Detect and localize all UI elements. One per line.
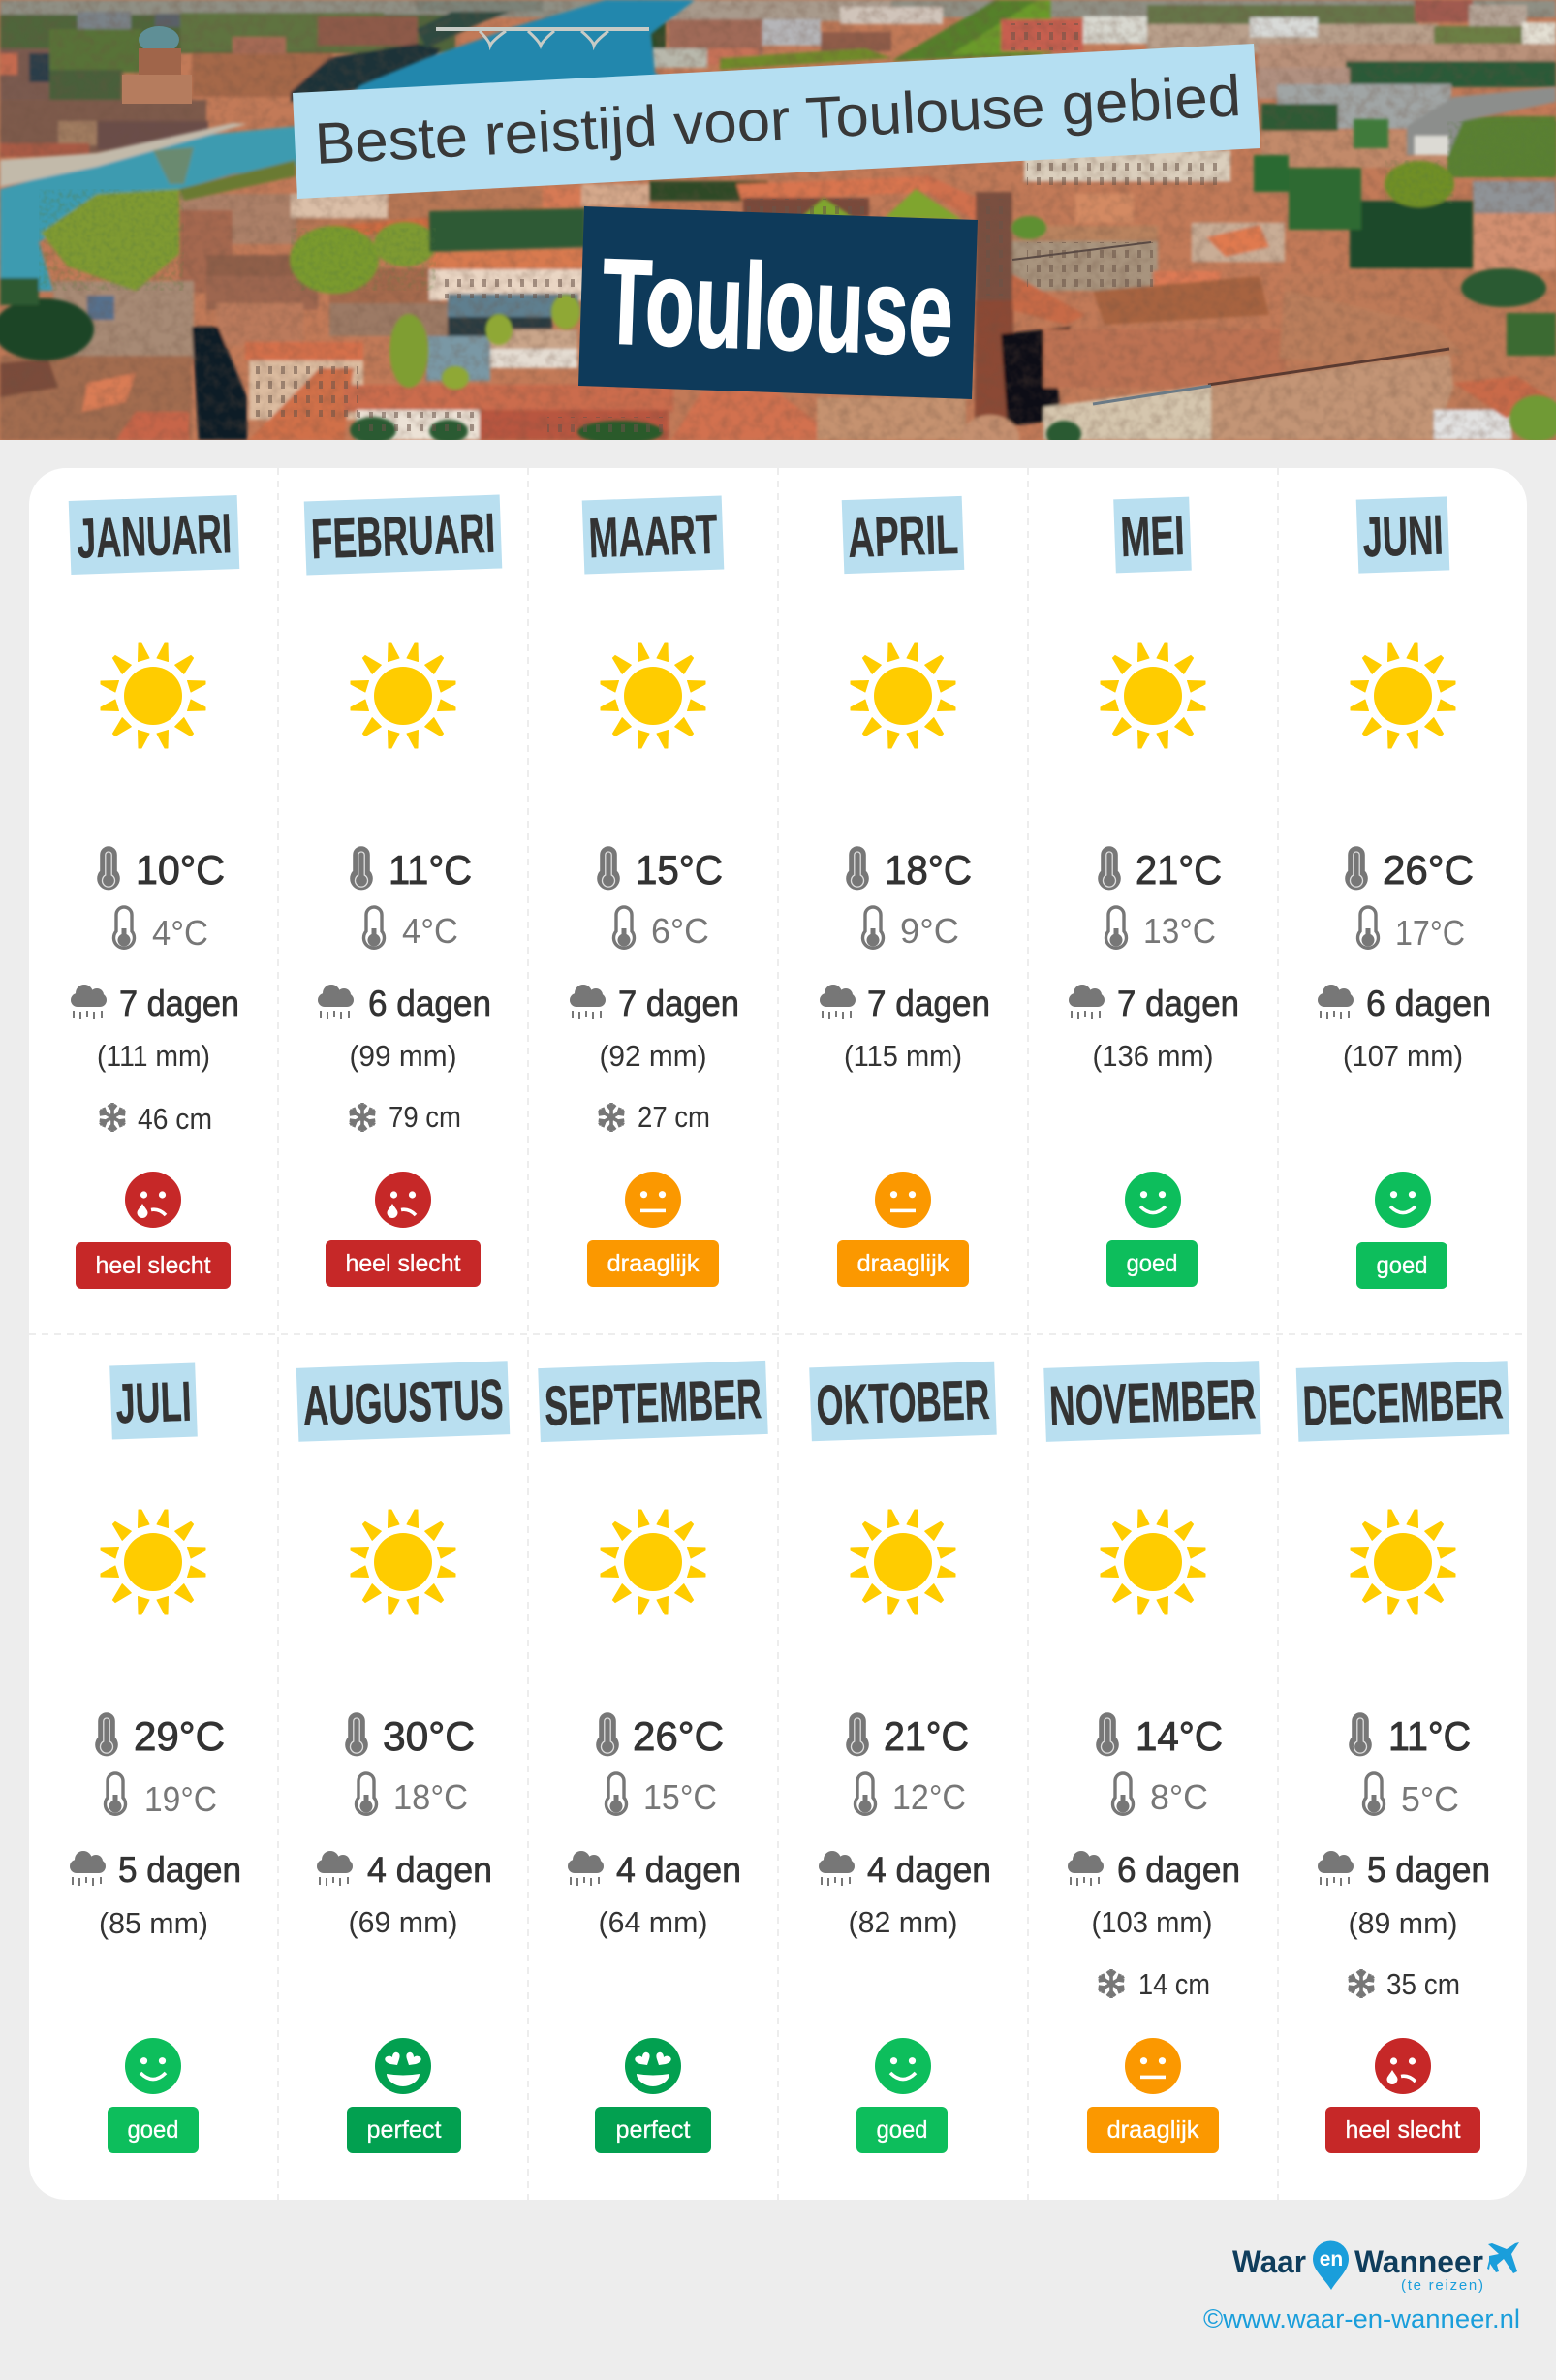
rating label: heel slecht — [95, 1252, 211, 1279]
low temperature — [357, 1773, 468, 1817]
icon: sun — [101, 1510, 205, 1614]
low temperature — [364, 907, 458, 951]
rain days: 4 dagen — [867, 1850, 991, 1890]
month label: juni: JUNI — [1361, 504, 1445, 569]
logo: Waar en Wanneer: Wanneer — [1354, 2244, 1483, 2279]
rating face — [1375, 2038, 1431, 2094]
month: mei — [1069, 497, 1239, 1287]
rating label — [595, 2107, 711, 2153]
snow depth — [597, 1100, 710, 1134]
high temperature: 15°C — [636, 847, 723, 892]
low temperature: 4°C — [152, 913, 208, 953]
low temperature: 18°C — [393, 1777, 468, 1817]
month label: februari — [304, 494, 502, 576]
rating label: goed — [876, 2116, 928, 2144]
high temperature — [351, 847, 472, 892]
month label: september — [538, 1361, 768, 1442]
icon: sun — [851, 643, 955, 748]
high temperature: 11°C — [389, 847, 472, 892]
river, quay and trees — [0, 0, 1556, 448]
high temperature: 10°C — [136, 847, 225, 892]
rain days — [318, 984, 491, 1023]
rainfall: (107 mm) — [1343, 1039, 1463, 1073]
low temperature: 9°C — [900, 911, 959, 951]
rating face — [625, 1172, 681, 1228]
month label: januari: JANUARI — [76, 502, 233, 571]
title banner — [293, 44, 1260, 199]
icon: sun — [1101, 643, 1205, 748]
website credit: ©www.waar-en-wanneer.nl — [1203, 2304, 1520, 2333]
low temperature — [614, 907, 709, 951]
rating label — [1325, 2107, 1480, 2153]
rainfall: (99 mm) — [349, 1039, 457, 1073]
month label: mei — [1113, 497, 1192, 573]
high temperature — [98, 847, 225, 892]
low temperature: 17°C — [1395, 913, 1465, 953]
rainfall: (89 mm) — [1349, 1906, 1457, 1940]
rain days — [820, 984, 990, 1023]
month: april — [820, 496, 990, 1287]
rain days: 5 dagen — [118, 1850, 241, 1890]
month label: maart: MAART — [587, 503, 719, 570]
high temperature — [598, 847, 723, 892]
high temperature: 26°C — [633, 1713, 724, 1759]
rating face — [1125, 2038, 1181, 2094]
rating label: goed — [1376, 1252, 1428, 1279]
high temperature — [847, 1713, 969, 1759]
month label: juli: JULI — [114, 1370, 193, 1435]
rating face — [125, 1172, 181, 1228]
low temperature: 12°C — [892, 1777, 966, 1817]
rainfall: (115 mm) — [844, 1039, 962, 1073]
low temperature: 5°C — [1401, 1779, 1459, 1819]
rating face — [1125, 1172, 1181, 1228]
rain days — [570, 984, 739, 1023]
snow depth: 35 cm — [1386, 1967, 1460, 2001]
high temperature: 11°C — [1388, 1713, 1471, 1759]
low temperature — [105, 1773, 217, 1819]
icon: sun — [101, 643, 205, 748]
high temperature: 14°C — [1136, 1713, 1223, 1759]
rainfall: (92 mm) — [599, 1039, 707, 1073]
month: oktober — [809, 1362, 997, 2153]
building windows — [252, 23, 1226, 436]
rainfall: (111 mm) — [97, 1039, 210, 1073]
low temperature — [607, 1773, 717, 1817]
rating label: perfect — [616, 2116, 691, 2144]
month: juli — [70, 1362, 241, 2153]
icon: plane — [1487, 2242, 1519, 2273]
rainfall: (82 mm) — [849, 1905, 957, 1939]
low temperature — [855, 1773, 966, 1817]
month label: april — [842, 496, 964, 574]
rain days — [1318, 1850, 1490, 1890]
rating label — [856, 2107, 948, 2153]
icon: sun — [601, 643, 705, 748]
month: januari — [69, 495, 239, 1289]
rain days: 6 dagen — [1366, 984, 1491, 1023]
rating label — [1087, 2107, 1219, 2153]
icon: sun — [1351, 1510, 1455, 1614]
rating label — [347, 2107, 461, 2153]
high temperature — [847, 847, 972, 892]
snow depth — [1347, 1967, 1460, 2001]
rain days: 4 dagen — [616, 1850, 741, 1890]
month label: juli — [109, 1362, 198, 1440]
snow depth — [1097, 1967, 1210, 2001]
icon: sun — [1351, 643, 1455, 748]
rain days — [1069, 984, 1239, 1023]
snow depth — [98, 1102, 212, 1136]
rating label: draaglijk — [1106, 2116, 1199, 2144]
rating label: perfect — [366, 2116, 442, 2144]
rainfall: (85 mm) — [99, 1906, 208, 1940]
rating label — [837, 1240, 969, 1287]
rain days: 6 dagen — [1117, 1850, 1240, 1890]
high temperature: 18°C — [885, 847, 972, 892]
month: september — [538, 1361, 768, 2153]
rain days: 7 dagen — [119, 984, 239, 1023]
city name banner: Toulouse — [600, 235, 955, 381]
low temperature — [1364, 1773, 1459, 1819]
rating label — [587, 1240, 719, 1287]
icon: map pin: en — [1320, 2248, 1343, 2270]
month label: februari: FEBRUARI — [310, 502, 496, 571]
rooflines — [1012, 242, 1449, 404]
rating label — [76, 1242, 231, 1289]
month label: april: APRIL — [847, 503, 959, 570]
high temperature: 29°C — [134, 1713, 225, 1759]
logo: Waar en Wanneer: (te reizen) — [1401, 2277, 1483, 2294]
dome of La Grave — [122, 26, 192, 104]
rain days — [819, 1850, 991, 1890]
rainfall: (64 mm) — [599, 1905, 707, 1939]
logo: Waar en Wanneer — [1232, 2240, 1519, 2294]
rating label — [1356, 1242, 1447, 1289]
bridge over the river — [436, 29, 649, 46]
rating face — [875, 2038, 931, 2094]
logo: Waar en Wanneer: Waar — [1232, 2244, 1306, 2279]
month label: januari — [69, 495, 239, 575]
icon: sun — [601, 1510, 705, 1614]
rating label: draaglijk — [607, 1250, 700, 1277]
city name banner — [578, 206, 978, 399]
month label: november: NOVEMBER — [1048, 1367, 1257, 1438]
icon: sun — [851, 1510, 955, 1614]
low temperature: 15°C — [643, 1777, 717, 1817]
rating label: goed — [1126, 1250, 1178, 1277]
rain days: 6 dagen — [368, 984, 491, 1023]
high temperature: 26°C — [1383, 847, 1474, 892]
low temperature — [862, 907, 959, 951]
low temperature — [1106, 907, 1216, 951]
high temperature: 30°C — [383, 1713, 475, 1759]
rating face — [875, 1172, 931, 1228]
rain days — [317, 1850, 492, 1890]
rating label: heel slecht — [1345, 2116, 1461, 2144]
rating label — [1106, 1240, 1198, 1287]
rating label: draaglijk — [856, 1250, 949, 1277]
rooftop texture — [0, 0, 1556, 440]
icon: map pin — [1313, 2240, 1349, 2290]
panel: months card — [29, 468, 1527, 2200]
rating label — [326, 1240, 481, 1287]
month label: maart — [582, 496, 724, 574]
rainfall: (103 mm) — [1091, 1905, 1213, 1939]
low temperature — [1358, 907, 1465, 953]
snow depth — [348, 1100, 461, 1134]
rating label: goed — [128, 2116, 178, 2144]
foliage texture — [39, 121, 1556, 291]
rating label — [108, 2107, 199, 2153]
low temperature: 19°C — [144, 1779, 217, 1819]
month: februari — [304, 494, 502, 1287]
icon: sun — [1101, 1510, 1205, 1614]
rain days — [1068, 1850, 1240, 1890]
snow depth: 79 cm — [389, 1100, 461, 1134]
month: december — [1296, 1361, 1509, 2153]
rain days: 7 dagen — [618, 984, 739, 1023]
month label: juni — [1356, 496, 1449, 574]
rainfall: (69 mm) — [349, 1905, 457, 1939]
month label: augustus: AUGUSTUS — [301, 1367, 505, 1438]
rain days: 7 dagen — [1117, 984, 1239, 1023]
rain days — [70, 1850, 241, 1890]
rating face — [125, 2038, 181, 2094]
snow depth: 14 cm — [1138, 1967, 1210, 2001]
header photo: aerial view of Toulouse — [0, 0, 1556, 461]
rating face — [375, 2038, 431, 2094]
low temperature — [1112, 1773, 1208, 1817]
icon: sun — [351, 1510, 455, 1614]
high temperature: 21°C — [1136, 847, 1222, 892]
month label: mei: MEI — [1119, 504, 1186, 569]
month: november — [1043, 1361, 1261, 2153]
low temperature: 6°C — [651, 911, 709, 951]
rainfall: (136 mm) — [1093, 1039, 1213, 1073]
rain days: 4 dagen — [367, 1850, 492, 1890]
low temperature: 8°C — [1150, 1777, 1208, 1817]
rain days — [71, 984, 239, 1023]
rain days: 5 dagen — [1367, 1850, 1490, 1890]
month label: september: SEPTEMBER — [544, 1367, 762, 1438]
snow depth: 46 cm — [138, 1102, 212, 1136]
icon: sun — [351, 643, 455, 748]
high temperature — [1350, 1713, 1471, 1759]
month label: november — [1043, 1361, 1261, 1442]
rating label: heel slecht — [345, 1250, 461, 1277]
high temperature — [1097, 1713, 1223, 1759]
low temperature: 13°C — [1143, 911, 1216, 951]
rain days: 7 dagen — [867, 984, 990, 1023]
rating face — [1375, 1172, 1431, 1228]
high temperature: 21°C — [884, 1713, 969, 1759]
low temperature — [114, 907, 208, 953]
month: augustus — [296, 1361, 510, 2153]
high temperature — [1099, 847, 1222, 892]
month: maart — [570, 496, 739, 1287]
rating face — [375, 1172, 431, 1228]
month label: augustus — [296, 1361, 510, 1442]
month label: oktober: OKTOBER — [815, 1368, 991, 1437]
rating face — [625, 2038, 681, 2094]
snow depth: 27 cm — [638, 1100, 710, 1134]
month: juni — [1318, 496, 1491, 1289]
low temperature: 4°C — [402, 911, 458, 951]
month label: oktober — [809, 1362, 997, 1441]
title banner: Beste reistijd voor Toulouse gebied — [313, 63, 1243, 176]
